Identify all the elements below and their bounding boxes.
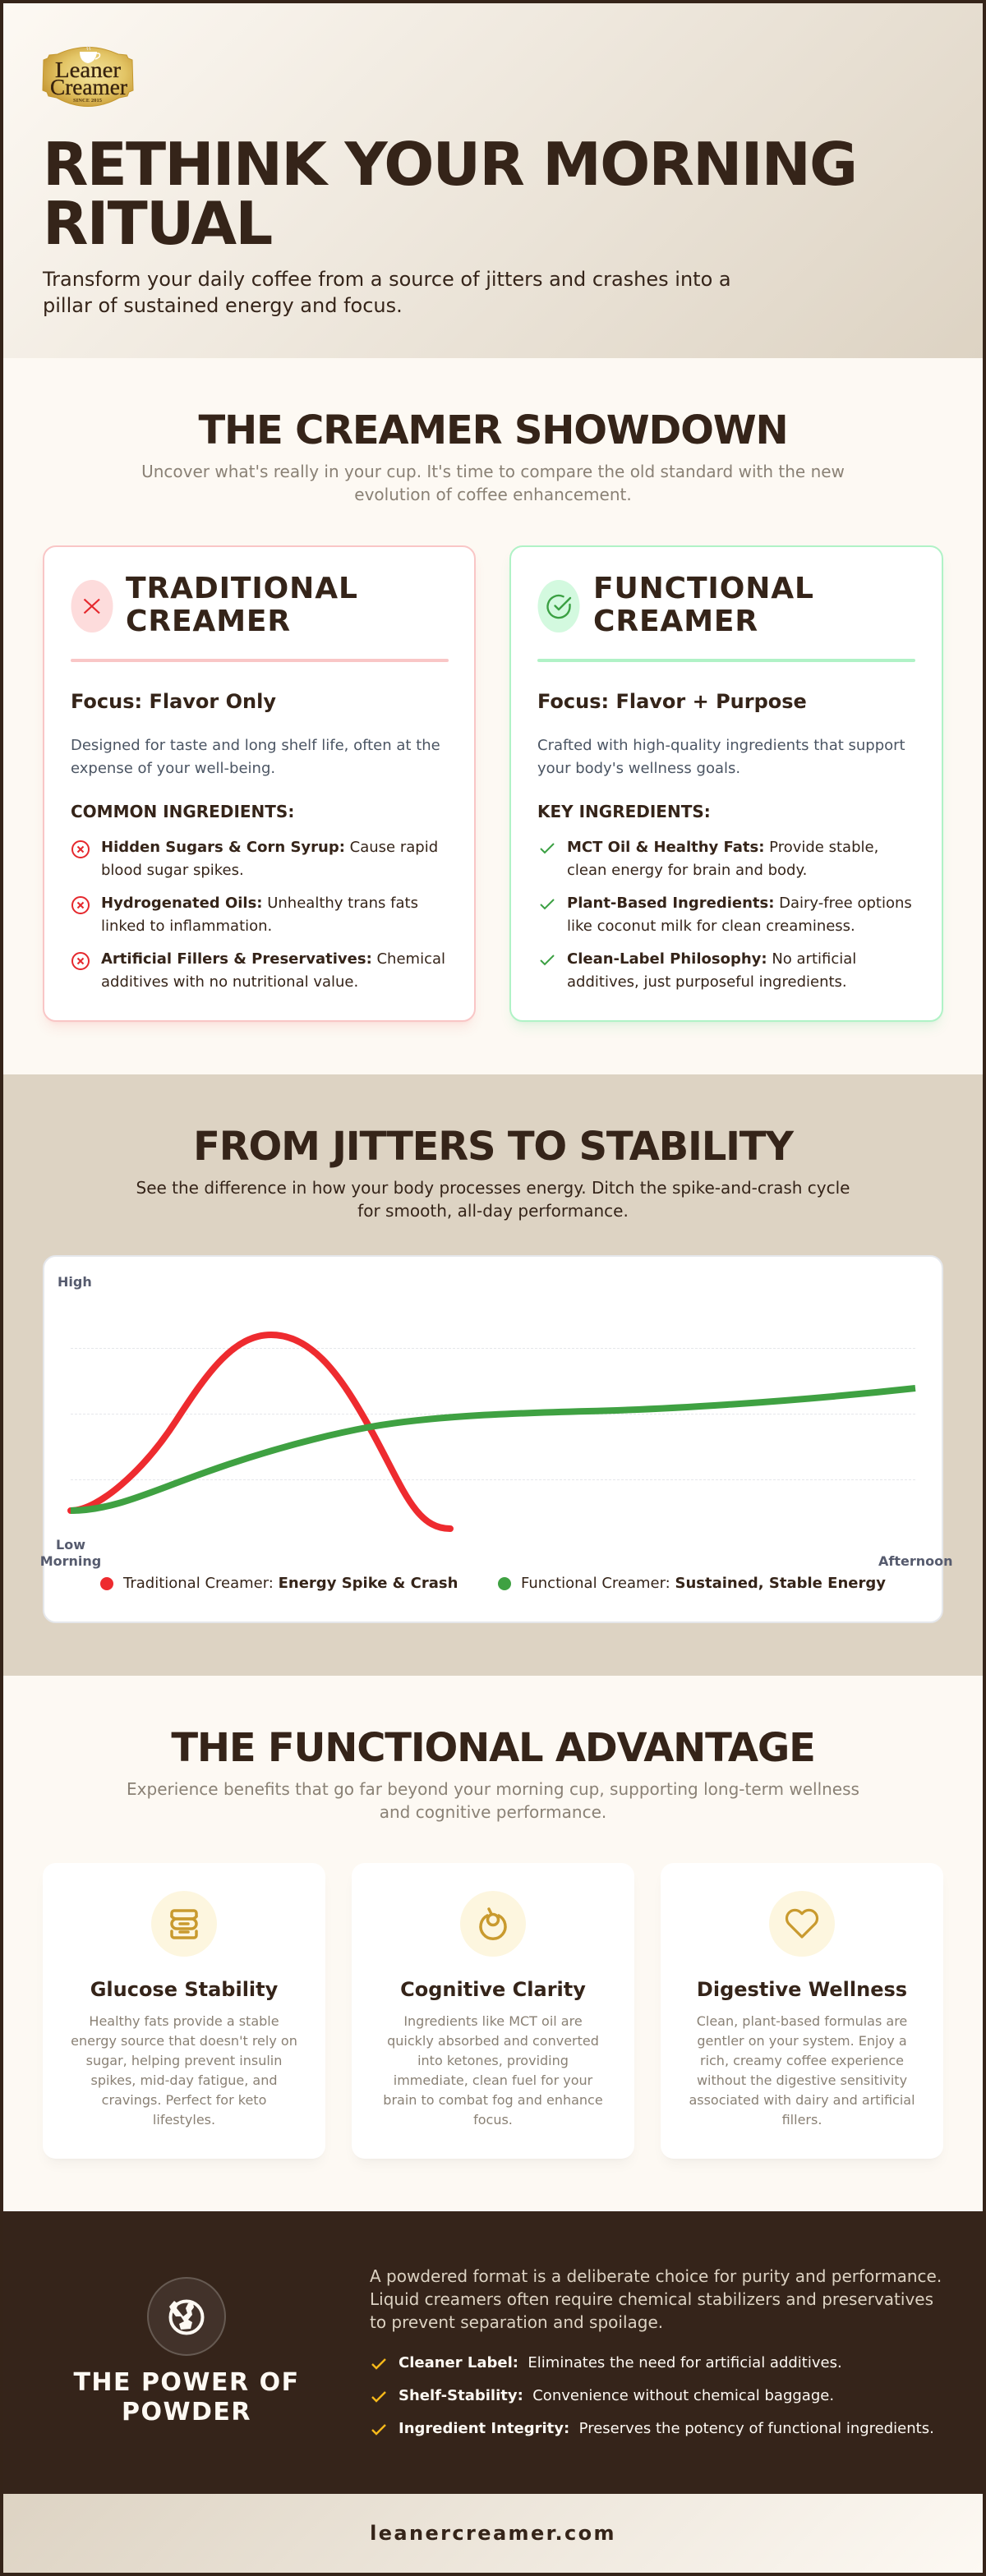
powder heading: THE POWER OF xyxy=(73,2368,300,2397)
powder description: Liquid creamers often require chemical stabilizers and preservatives xyxy=(370,2289,933,2309)
ingredient: clean label: additives, just purposeful ingredients. xyxy=(567,973,847,991)
main title: RITUAL xyxy=(43,189,271,258)
focus line: Focus: Flavor + Purpose xyxy=(537,690,807,713)
ingredient: plant-based xyxy=(540,895,912,935)
ingredient: artificial fillers: additives with no nutritional value. xyxy=(101,973,358,991)
benefit: cleaner label: Cleaner Label: Eliminates the need for artificial additives. xyxy=(399,2354,842,2371)
panel: traditional creamer xyxy=(43,545,476,1022)
section band: jitters to stability xyxy=(3,1074,983,1676)
panel heading: TRADITIONAL xyxy=(126,572,358,605)
card body: fillers. xyxy=(782,2112,822,2128)
powder description xyxy=(370,2266,942,2332)
card body: cravings. Perfect for keto xyxy=(102,2092,266,2108)
ingredient: mct oil xyxy=(540,839,878,879)
axis label: low morning: Morning xyxy=(40,1553,101,1569)
panel: digestive wellness xyxy=(661,1863,943,2159)
ingredient: artificial fillers: Artificial Fillers & Preservatives: Chemical xyxy=(101,950,445,968)
line chart: energy over time xyxy=(67,1332,915,1532)
ingredients heading: COMMON INGREDIENTS: xyxy=(71,802,294,821)
description: expense of your well-being. xyxy=(71,760,275,777)
card body xyxy=(689,2013,915,2128)
footer band xyxy=(3,2494,983,2573)
card body: lifestyles. xyxy=(153,2112,215,2128)
description: your body's wellness goals. xyxy=(537,760,740,777)
card body: sugar, helping prevent insulin xyxy=(86,2053,282,2068)
ingredient: clean label xyxy=(540,950,856,991)
icon: glucose xyxy=(151,1891,217,1957)
section intro: showdown xyxy=(141,462,845,504)
ingredient: artificial fillers xyxy=(71,950,445,991)
section heading: from jitters to stability: FROM JITTERS TO STABILITY xyxy=(193,1124,793,1170)
legend: traditional: Traditional Creamer: Energy Spike & Crash xyxy=(123,1575,458,1592)
card body: focus. xyxy=(473,2112,513,2128)
panel heading: FUNCTIONAL xyxy=(593,572,814,605)
section intro: advantage: and cognitive performance. xyxy=(380,1802,606,1822)
axis label: afternoon: Afternoon xyxy=(878,1553,953,1569)
card body: quickly absorbed and converted xyxy=(387,2033,599,2049)
icon: cognitive xyxy=(460,1891,526,1957)
section heading: the functional advantage: THE FUNCTIONAL ADVANTAGE xyxy=(171,1725,815,1771)
panel: functional creamer xyxy=(509,545,943,1022)
logo: Leaner Creamer badge: Leaner xyxy=(55,58,121,82)
powder heading xyxy=(73,2368,300,2426)
panel heading: CREAMER xyxy=(126,605,291,638)
icon: red cross badge xyxy=(71,580,113,632)
card body: associated with dairy and artificial xyxy=(689,2092,915,2108)
card title: Cognitive Clarity xyxy=(400,1978,586,2001)
logo: Leaner Creamer badge: Creamer xyxy=(50,75,127,99)
card title: Digestive Wellness xyxy=(697,1978,907,2001)
hero subtitle: pillar of sustained energy and focus. xyxy=(43,294,403,317)
card body: into ketones, providing xyxy=(417,2053,569,2068)
divider xyxy=(537,659,915,662)
icon: green check badge xyxy=(537,580,580,632)
ingredient: mct oil: clean energy for brain and body. xyxy=(567,862,807,879)
axis label: low morning xyxy=(40,1537,101,1569)
benefit: shelf stability: Shelf-Stability: Convenience without chemical baggage. xyxy=(399,2387,834,2404)
card body: Ingredients like MCT oil are xyxy=(403,2013,583,2029)
section intro: jitters xyxy=(136,1178,850,1221)
panel: cognitive clarity xyxy=(352,1863,634,2159)
hero header xyxy=(3,3,983,358)
description: Designed for taste and long shelf life, often at the xyxy=(71,737,440,754)
panel: glucose stability xyxy=(43,1863,325,2159)
main title xyxy=(43,130,856,258)
description: Crafted with high-quality ingredients that support xyxy=(537,737,905,754)
card body: without the digestive sensitivity xyxy=(697,2072,907,2088)
section band: power of powder xyxy=(3,2211,983,2494)
section intro: advantage: Experience benefits that go far beyond your morning cup, supporting long-term wellness xyxy=(127,1779,859,1799)
section heading: the creamer showdown: THE CREAMER SHOWDOWN xyxy=(198,407,788,453)
footer url: leanercreamer.com xyxy=(370,2522,616,2545)
icon: heart xyxy=(769,1891,835,1957)
card title: Glucose Stability xyxy=(90,1978,278,2001)
ingredient: hidden sugars xyxy=(71,839,438,879)
section intro: jitters: for smooth, all-day performance. xyxy=(357,1201,629,1221)
description xyxy=(71,737,440,777)
panel: energy chart xyxy=(43,1255,943,1623)
powder heading: POWDER xyxy=(122,2398,251,2426)
section intro: showdown: Uncover what's really in your cup. It's time to compare the old standard with the new xyxy=(141,462,845,481)
card body: gentler on your system. Enjoy a xyxy=(697,2033,907,2049)
ingredient: hydrogenated oils: Hydrogenated Oils: Unhealthy trans fats xyxy=(101,895,418,912)
panel heading xyxy=(593,572,814,638)
hero subtitle xyxy=(43,268,731,317)
card body: brain to combat fog and enhance xyxy=(383,2092,603,2108)
ingredient: hydrogenated oils xyxy=(71,895,418,935)
card body: energy source that doesn't rely on xyxy=(71,2033,297,2049)
description xyxy=(537,737,905,777)
hero subtitle: Transform your daily coffee from a source of jitters and crashes into a xyxy=(43,268,731,291)
ingredient: clean label: Clean-Label Philosophy: No artificial xyxy=(567,950,856,968)
icon: powder globe xyxy=(147,2277,226,2356)
logo: Leaner Creamer badge xyxy=(43,46,133,107)
ingredient: hydrogenated oils: linked to inflammation. xyxy=(101,918,272,935)
main title: RETHINK YOUR MORNING xyxy=(43,130,856,199)
card body xyxy=(383,2013,603,2128)
focus line: Focus: Flavor Only xyxy=(71,690,276,713)
card body: Healthy fats provide a stable xyxy=(89,2013,279,2029)
legend: functional: Functional Creamer: Sustained, Stable Energy xyxy=(521,1575,886,1592)
card body: immediate, clean fuel for your xyxy=(394,2072,592,2088)
benefit: ingredient integrity: Ingredient Integrity: Preserves the potency of functional ingredients. xyxy=(399,2420,934,2437)
card body: Clean, plant-based formulas are xyxy=(697,2013,907,2029)
ingredient: mct oil: MCT Oil & Healthy Fats: Provide stable, xyxy=(567,839,878,856)
card body: spikes, mid-day fatigue, and xyxy=(90,2072,278,2088)
divider xyxy=(71,659,449,662)
panel heading xyxy=(126,572,358,638)
axis label: high: High xyxy=(58,1274,92,1290)
axis label: low morning: Low xyxy=(56,1537,85,1552)
section intro: advantage xyxy=(127,1779,859,1822)
panel heading: CREAMER xyxy=(593,605,758,638)
ingredient: plant-based: Plant-Based Ingredients: Dairy-free options xyxy=(567,895,912,912)
ingredient: hidden sugars: blood sugar spikes. xyxy=(101,862,244,879)
section intro: jitters: See the difference in how your body processes energy. Ditch the spike-and-crash cycle xyxy=(136,1178,850,1198)
ingredient: hidden sugars: Hidden Sugars & Corn Syrup: Cause rapid xyxy=(101,839,438,856)
powder description: A powdered format is a deliberate choice for purity and performance. xyxy=(370,2266,942,2286)
ingredients heading: KEY INGREDIENTS: xyxy=(537,802,711,821)
card body xyxy=(71,2013,297,2128)
ingredient: plant-based: like coconut milk for clean creaminess. xyxy=(567,918,855,935)
card body: rich, creamy coffee experience xyxy=(700,2053,904,2068)
logo: Leaner Creamer badge: SINCE 2015 xyxy=(73,98,103,104)
powder description: to prevent separation and spoilage. xyxy=(370,2312,663,2332)
section intro: showdown: evolution of coffee enhancement. xyxy=(354,485,632,504)
